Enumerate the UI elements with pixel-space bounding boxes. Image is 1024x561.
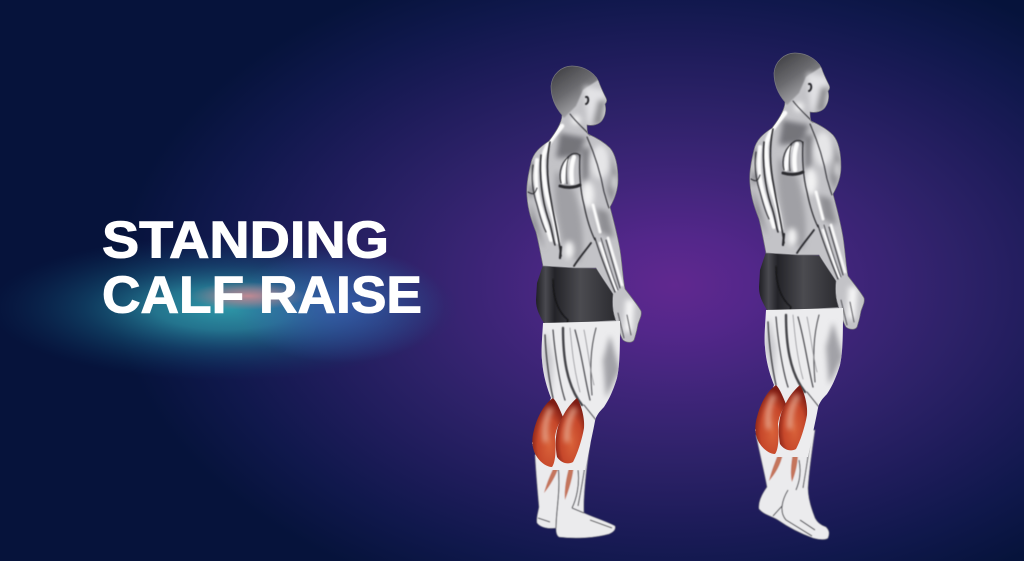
title: [102, 212, 422, 324]
glow behind title: [0, 236, 460, 380]
title line 1: STANDING: [102, 212, 389, 270]
figure: raised on toes: [223, 0, 1024, 548]
lower legs and raised feet: [756, 430, 829, 540]
lower legs and flat feet: [535, 430, 615, 538]
title line 2: CALF RAISE: [102, 266, 422, 324]
body with muscle detail and highlighted calves: [223, 0, 1024, 548]
